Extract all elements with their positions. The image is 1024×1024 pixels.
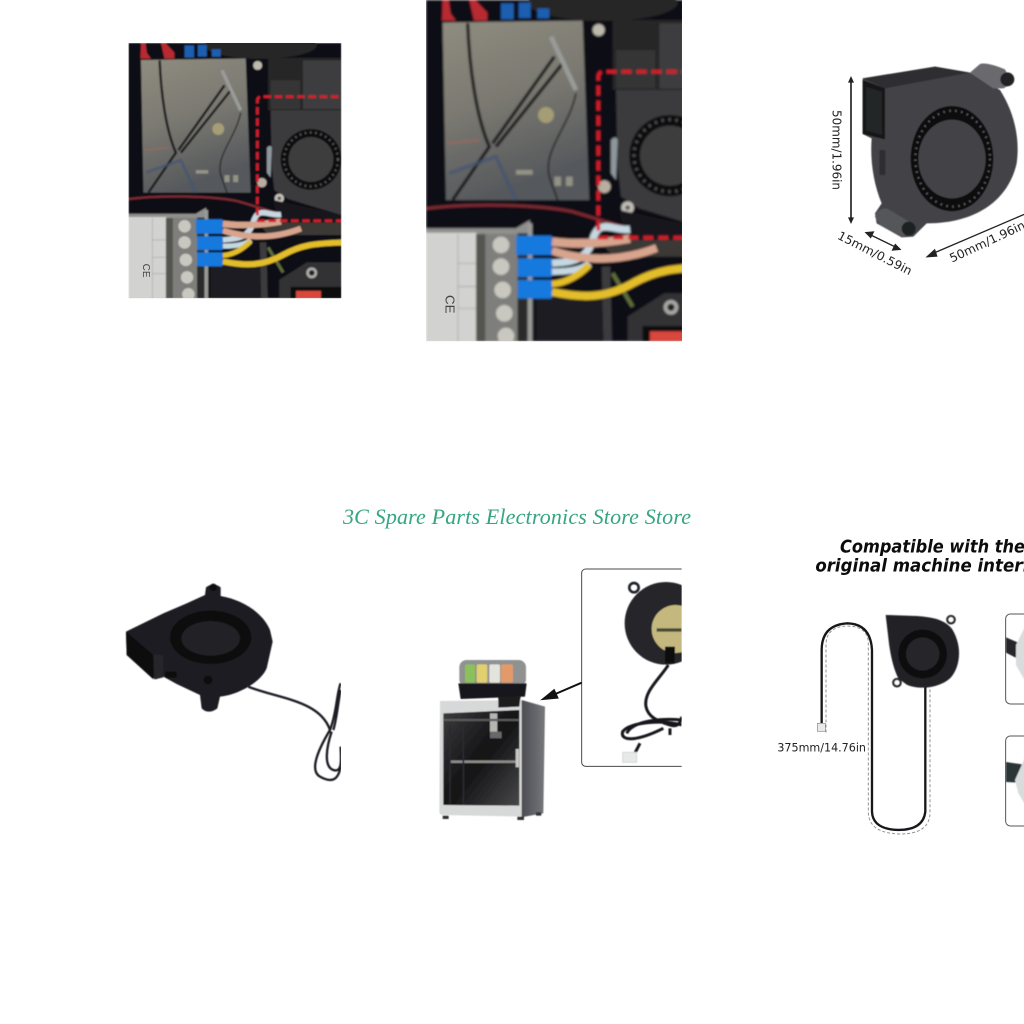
icon: 3D printer — [439, 660, 545, 820]
label: height: 50mm/1.96in — [830, 110, 844, 190]
icon: blower fan with measurements — [863, 63, 1018, 237]
arrow: depth — [866, 232, 900, 250]
panel: connector detail bottom — [1006, 736, 1024, 826]
photo: wiring inside printer, large view: CE — [442, 295, 457, 314]
photo: wiring inside printer, large view — [426, 0, 682, 342]
heading: compatibility — [815, 536, 1024, 577]
label: width: 50mm/1.96in — [947, 218, 1024, 265]
photo: black blower fan with cable — [126, 584, 341, 780]
compatibility panel — [777, 536, 1024, 834]
label: depth: 15mm/0.59in — [835, 229, 914, 278]
icon: fan with long cable — [817, 615, 959, 834]
arrow: height — [848, 82, 853, 219]
fan dimensions diagram — [830, 63, 1024, 278]
panel: connector detail top — [1006, 614, 1024, 704]
photo: wiring inside printer, small view — [128, 31, 341, 301]
panel: inset with fan — [581, 568, 682, 767]
store name heading: 3C Spare Parts Electronics Store Store — [342, 504, 691, 529]
label: cable length: 375mm/14.76in — [777, 741, 866, 755]
photo: wiring inside printer, small view: CE — [140, 264, 151, 278]
arrow: width — [927, 213, 1024, 257]
arrow: to printer — [543, 683, 582, 699]
printer with inset fan — [439, 568, 682, 821]
